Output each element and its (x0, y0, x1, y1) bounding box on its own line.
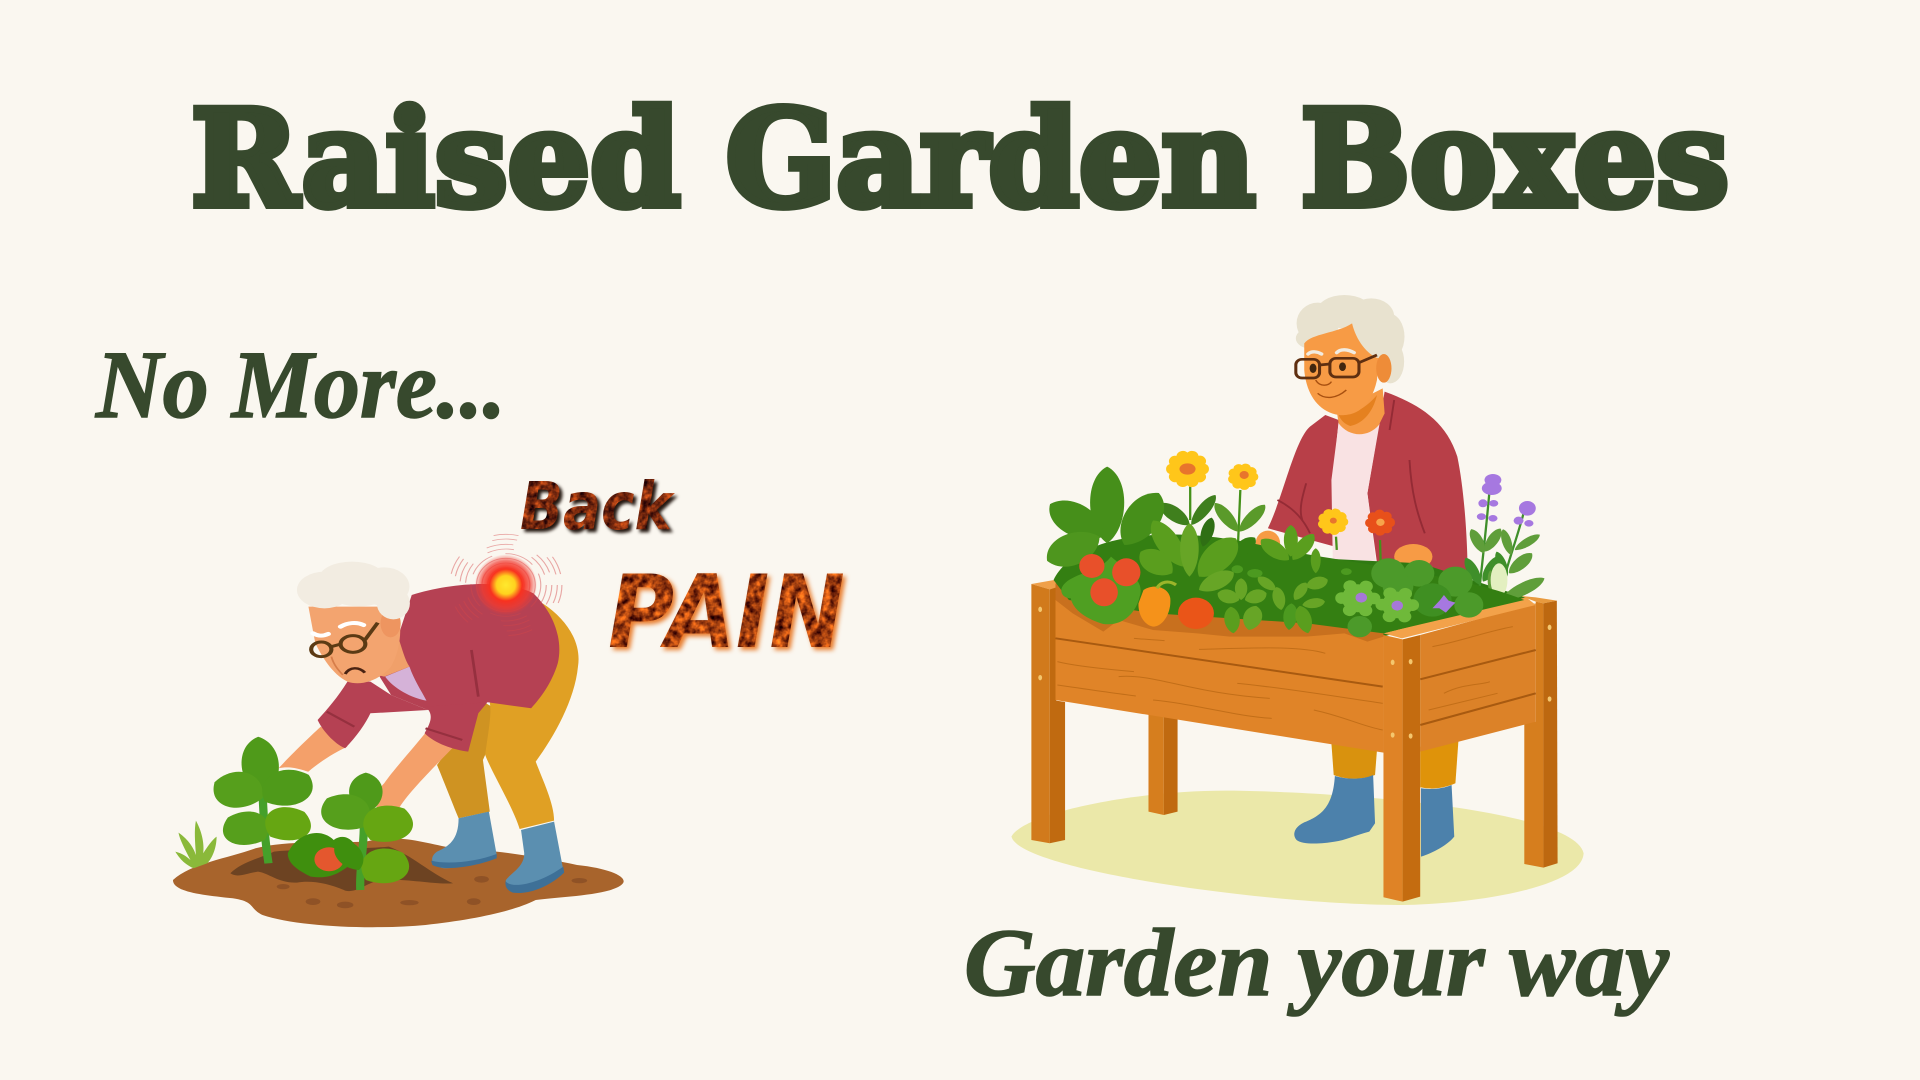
plant right (310, 773, 424, 892)
boots (1294, 775, 1454, 857)
pain rings (450, 534, 562, 636)
soil mound (173, 838, 624, 927)
pepper and tomato (1138, 582, 1214, 629)
pain glow (475, 554, 537, 616)
screws (1038, 607, 1551, 739)
grass tuft (175, 821, 217, 868)
glasses (311, 623, 378, 657)
low dark plant with tomato (288, 833, 358, 877)
back leg (1148, 713, 1178, 815)
glasses (1296, 355, 1377, 378)
side panel (1383, 597, 1536, 752)
front leg and boot (485, 603, 579, 893)
ground ellipse (1011, 791, 1584, 905)
sweater (318, 584, 559, 752)
neck and collar (370, 637, 426, 701)
left front leg (1031, 577, 1073, 843)
shirt (1331, 423, 1380, 570)
front panel (1055, 583, 1383, 753)
plant left (204, 736, 324, 863)
small herb plants (1215, 525, 1352, 635)
hands (1256, 531, 1432, 569)
front corner leg (1383, 635, 1420, 902)
title: Raised Garden Boxes (191, 82, 1729, 237)
illustration: smiling woman upper body (1256, 295, 1468, 577)
arm near (279, 727, 347, 772)
hair (1296, 295, 1405, 383)
illustration: planter lower part (1011, 713, 1584, 905)
head (297, 562, 410, 683)
bushy greens on right (1371, 558, 1483, 618)
neck (1337, 388, 1385, 434)
face (1304, 323, 1392, 415)
big dark green leaves (1039, 467, 1524, 633)
cardigan (1268, 392, 1468, 577)
back leg and boot (431, 702, 504, 868)
trouser legs (1331, 740, 1458, 789)
centre leafy plant (1132, 515, 1261, 597)
text: Garden your way: Garden your way (964, 909, 1669, 1016)
soil and plant mass (1055, 550, 1528, 637)
illustration: plants in planter (1039, 456, 1548, 637)
illustration: woman bending with back pain (173, 534, 624, 927)
clover flowers (1342, 584, 1455, 637)
text: PAIN: PAIN (608, 553, 845, 671)
text: No More: No More... (95, 331, 506, 438)
right rear leg (1520, 596, 1558, 868)
text: Back: Back (520, 468, 676, 545)
tomatoes (1079, 554, 1140, 606)
lavender (1461, 474, 1548, 605)
yellow flowers with stems (1155, 456, 1390, 567)
illustration: wooden raised planter (1031, 550, 1558, 902)
arm far with hand (375, 730, 455, 812)
